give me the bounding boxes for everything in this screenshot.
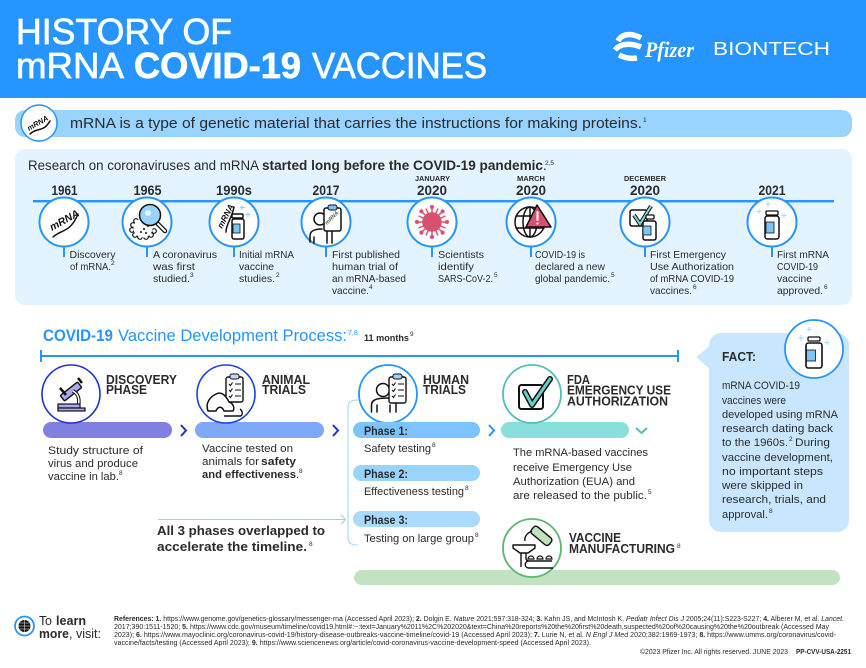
step: vaccine manufacturing xyxy=(354,519,840,585)
step: discovery phase: virus and produce xyxy=(48,458,138,470)
step: FDA emergency use authorization: Authorization (EUA) and xyxy=(513,476,635,488)
overlap note with arrow xyxy=(157,515,346,554)
event: March 2020: global pandemic. xyxy=(535,273,610,285)
event: 1990s: mRNA xyxy=(215,202,236,230)
step: FDA emergency use authorization xyxy=(501,365,671,502)
event: 2021: vaccine xyxy=(777,273,812,285)
step: human trials: HUMAN xyxy=(423,373,469,387)
event: 1965: 1965 xyxy=(134,182,162,198)
event: December 2020: 6 xyxy=(693,284,697,291)
phase 3 xyxy=(353,511,480,545)
step: FDA emergency use authorization: FDA xyxy=(567,373,590,387)
event: 1961: of mRNA. xyxy=(70,261,111,273)
timeline axis xyxy=(33,200,834,202)
event: December 2020: DECEMBER xyxy=(624,174,667,183)
icon: mRNA strand: mRNA xyxy=(26,113,50,133)
definition banner xyxy=(15,105,852,141)
duration label: 11 months xyxy=(364,333,409,344)
phase 2 xyxy=(353,465,480,498)
event: 2017 xyxy=(302,182,406,297)
callout: fact: research dating back xyxy=(722,423,834,435)
callout: fact: 2 xyxy=(789,436,793,443)
event: January 2020: SARS-CoV-2. xyxy=(438,273,493,285)
event: 1965: studied. xyxy=(153,273,190,285)
copyright and code: PP-CVV-USA-2251 xyxy=(796,649,851,656)
references: References: 1. https://www.genome.gov/genetics-glossary/messenger-rna (Accessed April 2023); 2. Dolgin E. Nature 2021;597:318-324; 3. Kahn JS, and McIntosh K. Pediatr Infect Dis J 2005;24(11):S223-S227; 4. Alberer M, et al. Lancet. xyxy=(114,616,844,623)
callout: fact: vaccines were xyxy=(722,395,786,407)
callout: fact: research, trials, and xyxy=(722,494,826,506)
event: March 2020: MARCH xyxy=(517,174,545,183)
step: FDA emergency use authorization: are released to the public. xyxy=(513,490,647,502)
logo: Pfizer xyxy=(615,35,694,62)
step: FDA emergency use authorization: EMERGENCY USE xyxy=(567,384,671,398)
references xyxy=(114,616,844,647)
phase 1: Phase 1: xyxy=(364,426,408,438)
process heading: Vaccine Development Process: xyxy=(118,327,347,345)
references: 2023); 6. https://www.mayoclinic.org/coronavirus-covid-19/history-disease-outbreaks-vaccine-timeline/covid-19 (Accessed April 2023); 7. Lurie N, et al. N Engl J Med 2020;382:1969-1973; 8. https://www.umms.org/coronavirus/covid- xyxy=(114,632,837,639)
event: 2017: mRNA xyxy=(324,210,340,226)
event: January 2020: JANUARY xyxy=(415,174,450,183)
process heading: 7,8 xyxy=(348,330,358,337)
event: 1990s: 2 xyxy=(276,272,280,279)
step: discovery phase: Study structure of xyxy=(48,445,144,457)
logo: Pfizer: Pfizer xyxy=(644,37,694,62)
event: 2017: First published xyxy=(332,249,400,261)
callout: fact xyxy=(696,320,849,532)
step: human trials: TRIALS xyxy=(423,383,466,397)
step: animal trials: . xyxy=(296,469,299,481)
phase 1: Safety testing xyxy=(364,443,431,455)
event: 1990s: studies. xyxy=(239,273,275,285)
event: March 2020: COVID-19 is xyxy=(535,249,585,261)
learn more prompt: , visit: xyxy=(69,627,101,641)
event: 2017: vaccine. xyxy=(332,285,369,297)
callout: fact: approval. xyxy=(722,509,768,521)
event: 2017: an mRNA-based xyxy=(332,273,406,285)
references: vaccine/facts/testing (Accessed April 2023); 9. https://www.sciencenews.org/article/covid-coronavirus-vaccine-development-speed (Accessed April 2023). xyxy=(114,640,591,647)
event: January 2020: identify xyxy=(438,261,475,273)
event: 2017: 4 xyxy=(369,284,373,291)
copyright and code: ©2023 Pfizer Inc. All rights reserved. JUNE 2023 xyxy=(640,648,788,656)
icon: mRNA strand xyxy=(21,105,57,141)
step: FDA emergency use authorization: The mRNA-based vaccines xyxy=(513,447,648,459)
icon: microscope xyxy=(42,365,100,423)
event: January 2020: 5 xyxy=(494,272,498,279)
step: discovery phase: PHASE xyxy=(106,383,147,397)
callout: fact: vaccine development, xyxy=(722,452,833,464)
phase 1 xyxy=(353,422,480,455)
arrow: human to FDA xyxy=(489,425,494,436)
copyright and code xyxy=(640,648,851,656)
step: FDA emergency use authorization: AUTHORIZATION xyxy=(567,394,668,408)
overlap note with arrow: accelerate the timeline. xyxy=(157,540,307,554)
learn more prompt: To xyxy=(39,614,52,628)
event: March 2020 xyxy=(506,174,615,285)
step: animal trials: and effectiveness xyxy=(202,469,296,481)
event: 2021: approved. xyxy=(777,285,823,297)
event: 1990s: vaccine xyxy=(239,261,274,273)
event: 1965: 3 xyxy=(190,272,194,279)
arrow: animal to human xyxy=(333,425,338,436)
event: 2017: human trial of xyxy=(332,261,398,273)
phase 2: Phase 2: xyxy=(364,469,408,481)
event: December 2020: First Emergency xyxy=(650,249,727,261)
icon: vaccine vial xyxy=(785,320,843,378)
references: 2017;390:1511-1520; 5. https://www.cdc.gov/museum/timeline/covid19.html#:~:text=January%2011%2C%202020&text=China%20reports%20the%20first%20death,suspected%20of%20causing%20the%20outbreak (Accessed May xyxy=(114,624,829,631)
overlap note with arrow: All 3 phases overlapped to xyxy=(157,524,325,538)
event: 2021: 2021 xyxy=(758,182,786,198)
icon: checkbox xyxy=(503,365,561,423)
event: 1961 xyxy=(40,182,116,273)
icon: person with clipboard xyxy=(359,365,417,423)
process heading: COVID-19 xyxy=(43,327,113,345)
icon: globe xyxy=(15,616,34,636)
phases bracket xyxy=(348,400,358,545)
callout: fact: to the 1960s. xyxy=(722,437,788,449)
event: March 2020: 2020 xyxy=(516,182,546,198)
learn more prompt: learn xyxy=(56,614,86,628)
step: animal trials: 8 xyxy=(299,468,303,475)
phase 2: 8 xyxy=(465,485,469,492)
title: COVID-19 xyxy=(134,45,301,86)
step: FDA emergency use authorization: 5 xyxy=(648,489,652,496)
definition text: 1 xyxy=(643,117,647,124)
step: animal trials: TRIALS xyxy=(262,383,306,397)
arrow: discovery to animal xyxy=(181,425,186,436)
phase 3: Testing on large group xyxy=(364,533,474,545)
event: 1961: mRNA xyxy=(48,208,82,234)
step: vaccine manufacturing: VACCINE xyxy=(569,531,621,545)
timeline heading: started long before the COVID-19 pandemic xyxy=(262,158,543,173)
event: 1990s xyxy=(210,182,294,285)
learn more prompt: more xyxy=(39,627,69,641)
event: 2021: COVID-19 xyxy=(777,261,818,273)
title xyxy=(16,11,487,86)
header banner xyxy=(0,0,866,98)
overlap note with arrow: 8 xyxy=(309,541,313,548)
logo: BioNTech: BIONTECH xyxy=(713,39,830,59)
callout: fact: no important steps xyxy=(722,466,824,478)
timeline heading: . xyxy=(543,158,547,173)
event: March 2020: declared a new xyxy=(535,261,605,273)
callout: fact: mRNA COVID-19 xyxy=(722,380,800,392)
event: December 2020: Use Authorization xyxy=(650,261,734,273)
callout: fact: were skipped in xyxy=(721,480,803,492)
icon: animal with clipboard xyxy=(197,365,255,423)
panel: history timeline xyxy=(15,149,852,305)
callout: fact: 8 xyxy=(769,508,773,515)
learn more prompt xyxy=(15,614,101,641)
step: animal trials xyxy=(195,365,324,481)
event: 2021: 6 xyxy=(824,284,828,291)
duration label: 9 xyxy=(410,331,414,338)
event: January 2020: Scientists xyxy=(438,249,484,261)
phase 3: Phase 3: xyxy=(364,515,408,527)
event: December 2020: 2020 xyxy=(630,182,660,198)
timeline heading: Research on coronaviruses and mRNA xyxy=(28,158,259,173)
step: discovery phase xyxy=(42,365,178,483)
icon: production line xyxy=(503,519,561,577)
event: 1965: A coronavirus xyxy=(153,249,217,261)
callout: fact: During xyxy=(795,437,830,449)
step: discovery phase: vaccine in lab. xyxy=(48,471,119,483)
timeline heading xyxy=(28,158,554,173)
title: VACCINES xyxy=(312,45,487,86)
event: January 2020 xyxy=(408,174,498,285)
title: mRNA xyxy=(16,45,124,86)
step: vaccine manufacturing: MANUFACTURING xyxy=(569,542,675,556)
duration bar xyxy=(40,350,679,362)
phase 2: Effectiveness testing xyxy=(364,486,464,498)
step: animal trials: ANIMAL xyxy=(262,373,310,387)
event: December 2020 xyxy=(620,174,734,297)
step: animal trials: Vaccine tested on xyxy=(202,443,293,455)
event: 2021 xyxy=(748,182,829,297)
step: FDA emergency use authorization: receive Emergency Use xyxy=(513,462,632,474)
step: discovery phase: 8 xyxy=(119,470,123,477)
step: animal trials: animals for xyxy=(202,456,259,468)
step: human trials xyxy=(348,365,480,545)
definition text: mRNA is a type of genetic material that carries the instructions for making proteins. xyxy=(70,115,642,132)
step: animal trials: safety xyxy=(261,456,297,468)
arrow: FDA to manufacturing xyxy=(636,428,647,433)
event: 1990s: 1990s xyxy=(216,182,252,198)
step: vaccine manufacturing: 8 xyxy=(677,543,681,550)
event: 1965: was first xyxy=(152,261,195,273)
timeline heading: 2,5 xyxy=(545,160,554,167)
event: January 2020: 2020 xyxy=(417,182,447,198)
title: HISTORY OF xyxy=(16,11,232,52)
phase 3: 8 xyxy=(475,532,479,539)
event: 2021: First mRNA xyxy=(777,249,829,261)
event: 2017: 2017 xyxy=(312,182,340,198)
event: December 2020: of mRNA COVID-19 xyxy=(650,273,734,285)
step: discovery phase: DISCOVERY xyxy=(106,373,178,387)
event: March 2020: 5 xyxy=(611,272,615,279)
event: 1961: 1961 xyxy=(52,182,78,198)
callout: fact: developed using mRNA xyxy=(722,409,839,421)
callout: fact: FACT: xyxy=(722,349,756,364)
event: 1990s: Initial mRNA xyxy=(239,249,294,261)
event: December 2020: vaccines. xyxy=(650,285,692,297)
phase 1: 8 xyxy=(432,442,436,449)
event: 1965 xyxy=(122,182,217,285)
event: 1961: 2 xyxy=(111,260,115,267)
event: 1961: Discovery xyxy=(70,249,116,261)
